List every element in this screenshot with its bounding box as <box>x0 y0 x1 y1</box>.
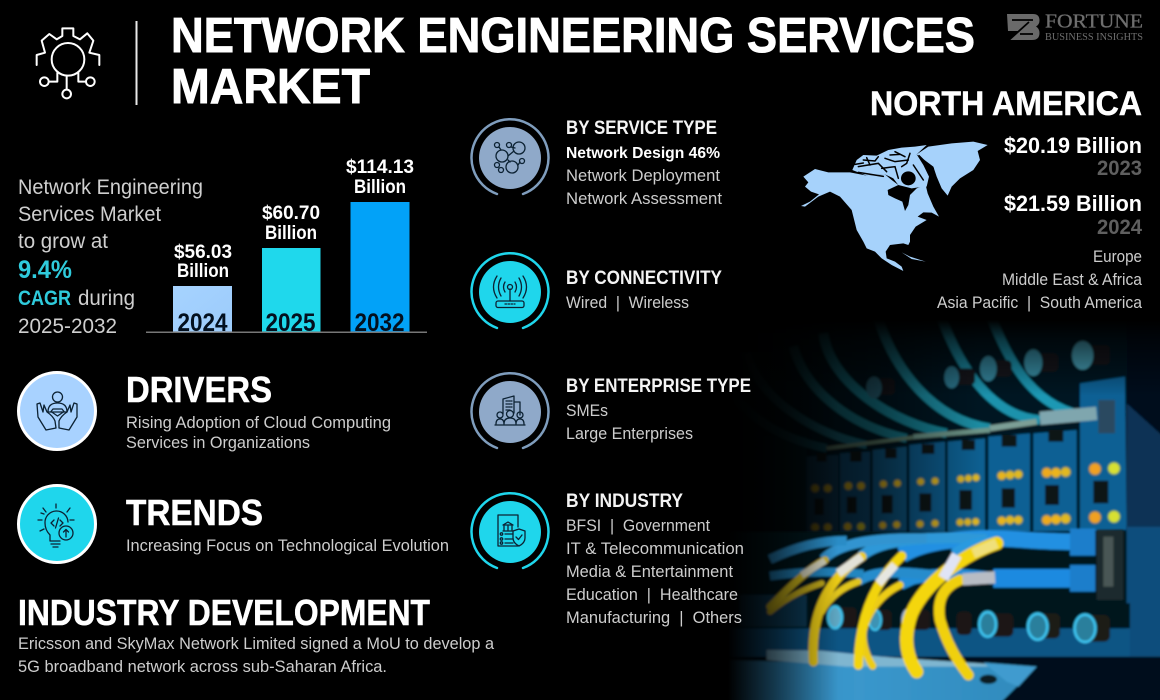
rack cards <box>807 455 838 533</box>
other regions list: Middle East & Africa <box>1002 270 1142 289</box>
industry development text: 5G broadband network across sub-Saharan Africa. <box>18 657 387 676</box>
growth text block: 2025-2032 <box>18 314 117 338</box>
drivers text <box>126 413 391 452</box>
bar 2025: $60.70 <box>262 203 320 224</box>
blue connectors <box>1070 528 1095 556</box>
value 2024: $21.59 Billion <box>1004 191 1142 216</box>
logo: Fortune Business Insights <box>1007 10 1143 43</box>
white cable sleeves <box>802 543 997 583</box>
bar chart <box>146 157 427 337</box>
growth text block <box>18 175 203 338</box>
heading: BY CONNECTIVITY <box>566 268 722 289</box>
icon: drivers <box>18 372 96 450</box>
logo: Fortune Business Insights: BUSINESS INSIGHTS <box>1045 32 1143 43</box>
growth text block: to grow at <box>18 229 108 253</box>
industry development text: Ericsson and SkyMax Network Limited signed a MoU to develop a <box>18 634 495 653</box>
value 2023: $20.19 Billion <box>1004 133 1142 158</box>
trends text: Increasing Focus on Technological Evolution <box>126 536 449 555</box>
year 2024: 2024 <box>1097 216 1142 239</box>
lower photo <box>734 526 1160 700</box>
growth text block: Services Market <box>18 202 161 226</box>
industry development heading: INDUSTRY DEVELOPMENT <box>18 592 430 633</box>
bar 2024: Billion <box>177 261 229 282</box>
list: Network Design 46% <box>566 145 720 162</box>
list: Education | Healthcare <box>566 585 738 604</box>
icon: enterprise building <box>472 373 548 448</box>
icon: people network <box>472 119 548 194</box>
segment: by service type <box>472 118 722 208</box>
ports <box>814 430 1108 515</box>
top-left darkening of rack <box>740 325 972 533</box>
photo fades <box>680 355 834 700</box>
yellow cables <box>770 543 997 675</box>
list: IT & Telecommunication <box>566 539 744 558</box>
map: north america <box>801 142 988 271</box>
segment: by industry <box>472 491 744 627</box>
bottom knobs <box>828 606 1110 642</box>
heading: BY ENTERPRISE TYPE <box>566 376 751 397</box>
bar 2032: 2032 <box>354 309 404 337</box>
photo: network server rack with cables <box>733 322 1160 700</box>
upper screw knobs <box>866 341 1110 399</box>
other regions list <box>937 247 1143 312</box>
list <box>566 516 744 627</box>
industry development text <box>18 634 495 676</box>
segment: by enterprise type <box>472 373 751 448</box>
list: Network Assessment <box>566 189 722 208</box>
bar 2032: Billion <box>354 177 406 198</box>
drivers text: Services in Organizations <box>126 433 310 452</box>
icon: document with shield <box>472 493 548 568</box>
list: SMEs <box>566 401 608 420</box>
bar 2024 <box>173 242 232 337</box>
list <box>566 145 722 208</box>
icon: wifi router <box>472 253 548 328</box>
bar 2032: $114.13 <box>346 157 414 178</box>
list <box>566 401 693 443</box>
growth text block: during <box>78 286 135 310</box>
heading: BY SERVICE TYPE <box>566 118 717 139</box>
growth text block: 9.4% <box>18 256 72 284</box>
blue tray <box>734 660 1038 700</box>
header divider <box>136 21 138 105</box>
segment: by connectivity <box>472 253 722 328</box>
connector frame <box>1097 530 1123 600</box>
title: NETWORK ENGINEERING SERVICES <box>171 9 975 63</box>
bar 2024: $56.03 <box>174 242 232 263</box>
heading: BY INDUSTRY <box>566 491 683 512</box>
list: Network Deployment <box>566 166 720 185</box>
bar 2025: Billion <box>265 223 317 244</box>
LEDs <box>811 462 1120 531</box>
blue cables <box>770 538 1073 584</box>
bar 2024: 2024 <box>178 309 228 337</box>
title: MARKET <box>171 60 370 114</box>
list: Media & Entertainment <box>566 562 733 581</box>
icon: gear network <box>37 28 99 98</box>
list: Wired | Wireless <box>566 293 689 312</box>
growth text block: Network Engineering <box>18 175 203 199</box>
trends heading: TRENDS <box>126 492 263 533</box>
list: Manufacturing | Others <box>566 608 742 627</box>
year 2023: 2023 <box>1097 157 1142 180</box>
list: BFSI | Government <box>566 516 710 535</box>
drivers text: Rising Adoption of Cloud Computing <box>126 413 391 432</box>
upper teal cables <box>784 323 1099 452</box>
other regions list: Asia Pacific | South America <box>937 293 1143 312</box>
bar 2032 <box>346 157 414 337</box>
icon: trends <box>18 486 96 562</box>
bar 2025 <box>262 203 320 337</box>
region heading: north america: NORTH AMERICA <box>870 85 1142 123</box>
growth text block: CAGR <box>18 286 71 310</box>
bar 2025: 2025 <box>266 309 316 337</box>
list: Large Enterprises <box>566 424 693 443</box>
north america values <box>1004 133 1142 239</box>
drivers heading: DRIVERS <box>126 369 272 410</box>
title <box>171 9 975 114</box>
logo: Fortune Business Insights: FORTUNE <box>1045 10 1143 32</box>
other regions list: Europe <box>1093 247 1142 266</box>
